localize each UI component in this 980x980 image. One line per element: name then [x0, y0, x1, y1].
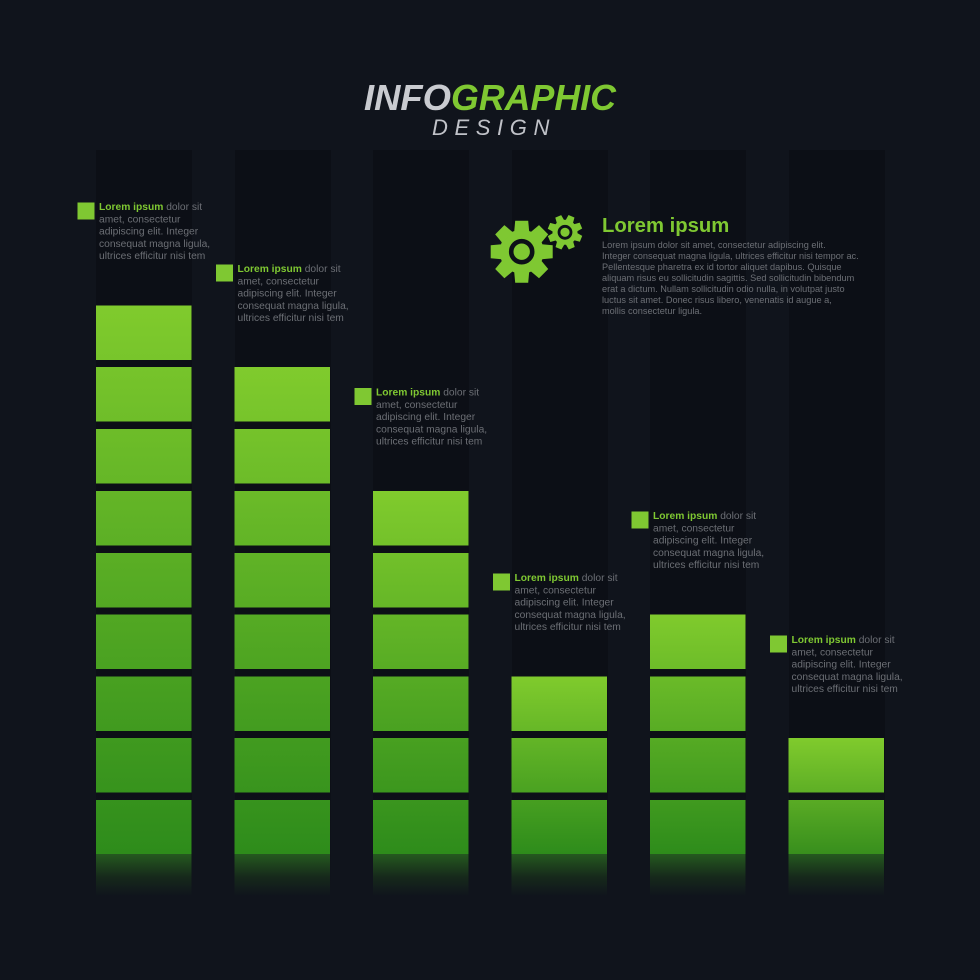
marker 4	[493, 574, 510, 590]
callout text 2: consequat magna ligula,	[238, 301, 349, 312]
main paragraph: mollis consectetur ligula.	[602, 306, 702, 316]
callout text 1: Lorem ipsum dolor sit	[99, 202, 202, 213]
callout text 2: adipiscing elit. Integer	[238, 289, 337, 300]
callout text 5: consequat magna ligula,	[653, 548, 764, 559]
callout text 3: adipiscing elit. Integer	[376, 412, 476, 423]
marker 5	[632, 512, 648, 528]
main paragraph	[602, 240, 859, 316]
bar column 4	[512, 676, 607, 854]
callout text 1: ultrices efficitur nisi tem	[99, 251, 205, 262]
callout text 2	[238, 264, 349, 324]
callout 5	[632, 511, 764, 571]
callout 2	[216, 264, 349, 324]
callout text 5	[653, 511, 764, 571]
callout text 4: Lorem ipsum dolor sit	[514, 573, 618, 584]
callout text 6: amet, consectetur	[792, 647, 874, 658]
callout text 5: adipiscing elit. Integer	[653, 536, 753, 547]
callout 4	[493, 573, 626, 633]
callout text 1: adipiscing elit. Integer	[99, 227, 199, 238]
callout text 5: ultrices efficitur nisi tem	[653, 560, 759, 571]
callout text 1	[99, 202, 210, 262]
bar column 2	[234, 367, 330, 854]
callout text 3: amet, consectetur	[376, 400, 458, 411]
callout 1	[78, 202, 210, 262]
callout text 1: amet, consectetur	[99, 214, 181, 225]
callout text 4: ultrices efficitur nisi tem	[514, 622, 621, 633]
main paragraph: Lorem ipsum dolor sit amet, consectetur adipiscing elit.	[602, 240, 826, 250]
title: DESIGN	[432, 115, 556, 140]
callout text 4: consequat magna ligula,	[514, 610, 626, 621]
callout text 6: adipiscing elit. Integer	[792, 660, 891, 671]
callout text 3: ultrices efficitur nisi tem	[376, 437, 482, 448]
callout text 2: Lorem ipsum dolor sit	[238, 264, 341, 275]
callout text 5: Lorem ipsum dolor sit	[653, 511, 756, 522]
marker 3	[354, 388, 372, 405]
title: GRAPHIC	[451, 77, 617, 118]
bar column 6	[788, 738, 884, 854]
main text block	[602, 215, 859, 316]
callout text 3: consequat magna ligula,	[376, 424, 487, 435]
icon: gears	[491, 215, 583, 283]
bar reflections	[96, 854, 884, 896]
bar column 3	[373, 491, 468, 854]
bar column 5	[650, 614, 746, 854]
callout text 4: amet, consectetur	[514, 585, 597, 596]
main paragraph: aliquam risus eu sollicitudin sagittis. Sed sollicitudin bibendum	[602, 273, 855, 283]
marker 2	[216, 264, 233, 282]
callout text 6: Lorem ipsum dolor sit	[792, 635, 895, 646]
callout text 6	[792, 635, 903, 695]
callout text 4	[514, 573, 626, 633]
title: INFO	[364, 77, 451, 118]
title	[364, 77, 617, 140]
callout text 1: consequat magna ligula,	[99, 239, 210, 250]
callout 3	[354, 388, 487, 448]
bar column 1	[96, 306, 192, 854]
callout text 2: amet, consectetur	[238, 276, 320, 287]
callout text 6: consequat magna ligula,	[792, 672, 903, 683]
callout text 4: adipiscing elit. Integer	[514, 598, 614, 609]
main paragraph: Pellentesque pharetra ex id tortor aliquet dapibus. Quisque	[602, 262, 842, 272]
marker 1	[78, 202, 94, 220]
callout text 3: Lorem ipsum dolor sit	[376, 388, 479, 398]
main paragraph: luctus sit amet. Donec risus libero, venenatis id augue a,	[602, 295, 832, 305]
callout text 2: ultrices efficitur nisi tem	[238, 313, 344, 324]
main heading: Lorem ipsum	[602, 215, 729, 237]
callout text 5: amet, consectetur	[653, 523, 735, 534]
main paragraph: Integer consequat magna ligula, ultrices efficitur nisi tempor ac.	[602, 251, 859, 261]
callout text 3	[376, 388, 487, 448]
main paragraph: erat a dictum. Nullam sollicitudin odio nulla, in volutpat justo	[602, 284, 845, 294]
marker 6	[770, 636, 787, 652]
callout text 6: ultrices efficitur nisi tem	[792, 684, 898, 695]
callout 6	[770, 635, 903, 695]
